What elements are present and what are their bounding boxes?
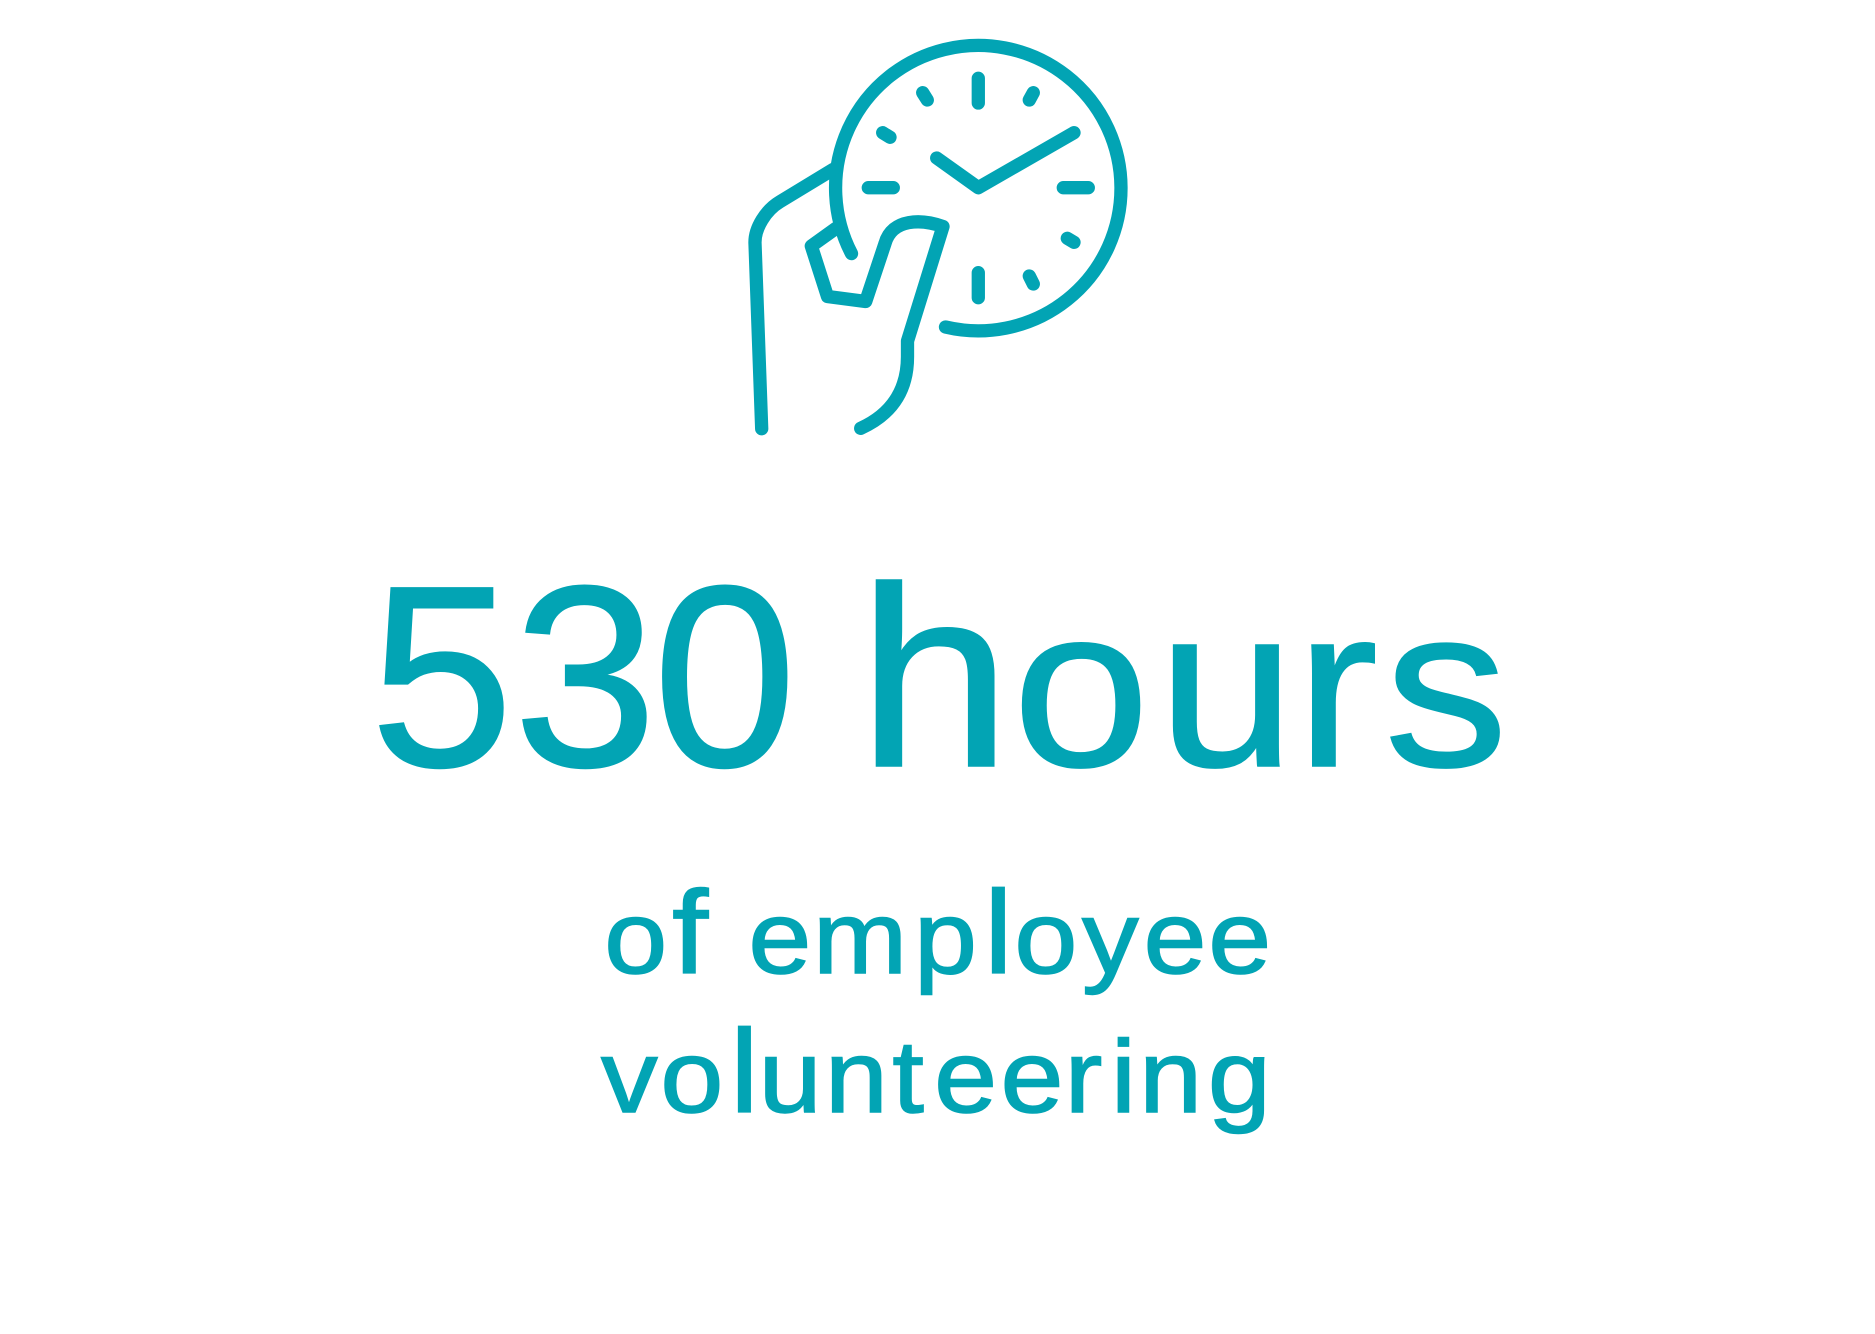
heading: 530 hours (370, 532, 1508, 821)
subtitle line 1: emp (715, 880, 977, 995)
subtitle line 1: oyee (1014, 880, 1271, 995)
subtitle: of employee volunteering (601, 867, 1271, 1138)
clock ring (836, 45, 1121, 331)
number 530: 530 (370, 532, 796, 821)
clock hour ticks (868, 78, 1088, 298)
subtitle line 1: o (604, 880, 667, 995)
word hours: h (858, 535, 1011, 820)
subtitle line 1: f (672, 867, 709, 999)
icon: hand holding clock (755, 45, 1121, 429)
subtitle line 2: vo (601, 1019, 723, 1134)
hand outline (755, 169, 943, 429)
subtitle line 2: unteering (759, 1019, 1271, 1134)
word hours: ours (1013, 560, 1508, 815)
subtitle line 1: l (984, 867, 1013, 999)
subtitle line 2: l (730, 1006, 759, 1138)
clock hands (937, 133, 1074, 188)
